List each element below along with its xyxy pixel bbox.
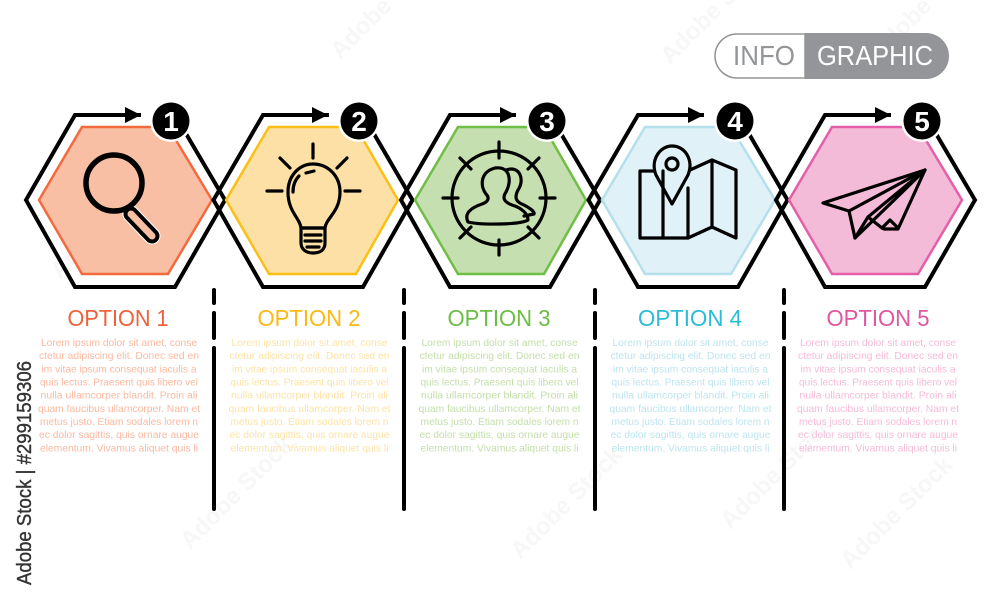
column: option 2 text: OPTION 2 <box>258 305 360 331</box>
number badge 1: 1 <box>163 106 179 137</box>
badge: INFO GRAPHIC <box>715 33 949 79</box>
column: option 3 text: quam faucibus ullamcorper. Nam et <box>418 403 581 415</box>
number badge 1 <box>150 100 192 142</box>
arrow 5 <box>875 107 891 123</box>
column: option 4 text: ec dolor sagittis, quis ornare augue <box>610 429 771 441</box>
column: option 2 text: elementum. Vivamus aliquet quis li <box>230 442 388 454</box>
column: option 4 text: ctetur adipiscing elit. Donec sed en <box>610 350 771 362</box>
column: option 4 text <box>610 305 772 454</box>
column: option 5 text <box>797 305 959 454</box>
panel: option 4 hexagon <box>588 107 788 287</box>
column: option 2 text: Lorem ipsum dolor sit amet, conse <box>232 337 388 349</box>
column: option 1 text: quis lectus. Praesent quis libero vel <box>40 376 198 388</box>
column: option 5 text: quam faucibus ullamcorper. Nam et <box>797 403 959 415</box>
watermark pattern: Adobe Stock <box>45 161 168 284</box>
column: option 1 text <box>38 305 200 454</box>
number badge 4 <box>714 100 756 142</box>
column: option 1 text: im vitae ipsum consequat iaculis a <box>42 363 197 375</box>
badge: INFO GRAPHIC: GRAPHIC <box>817 40 933 71</box>
column: option 3 text: metus justo. Etiam sodales lorem n <box>420 416 579 428</box>
stock id side label: Adobe Stock | #299159306 <box>14 361 36 585</box>
column: option 2 text: ctetur adipiscing elit. Donec sed en <box>230 350 390 362</box>
watermark pattern: Adobe Stock <box>505 441 628 564</box>
number badge 2 <box>338 100 380 142</box>
divider lines <box>214 290 784 509</box>
column: option 1 text: ec dolor sagittis, quis ornare augue <box>39 429 199 441</box>
column: option 5 text: quis lectus. Praesent quis libero vel <box>799 376 957 388</box>
column: option 3 text: nulla ullamcorper blandit. Proin ali <box>421 390 578 402</box>
badge: INFO GRAPHIC: INFO <box>733 40 795 71</box>
number badge 5: 5 <box>914 106 930 137</box>
number badge 3: 3 <box>539 106 555 137</box>
column: option 4 text: metus justo. Etiam sodales lorem n <box>612 416 770 428</box>
column: option 5 text: ctetur adipiscing elit. Donec sed en <box>798 350 958 362</box>
arrow 1 <box>125 107 141 123</box>
column: option 4 text: nulla ullamcorper blandit. Proin ali <box>612 390 769 402</box>
number badge 3 <box>526 100 568 142</box>
column: option 1 text: metus justo. Etiam sodales lorem n <box>40 416 198 428</box>
column: option 2 text <box>228 305 391 454</box>
icon: map with pin <box>640 146 736 238</box>
panel: option 2 hexagon <box>214 107 412 287</box>
column: option 5 text: Lorem ipsum dolor sit amet, conse <box>800 337 956 349</box>
column: option 5 text: elementum. Vivamus aliquet quis li <box>799 442 957 454</box>
panel: option 1 hexagon <box>26 107 225 287</box>
column: option 3 text: ctetur adipiscing elit. Donec sed en <box>420 350 580 362</box>
column: option 1 text: nulla ullamcorper blandit. Proin ali <box>40 390 198 402</box>
column: option 5 text: OPTION 5 <box>826 305 930 331</box>
column: option 4 text: quis lectus. Praesent quis libero vel <box>612 376 770 388</box>
column: option 3 text <box>418 305 581 454</box>
column: option 3 text: im vitae ipsum consequat iaculis a <box>422 363 577 375</box>
column: option 2 text: quam faucibus ullamcorper. Nam et <box>228 403 391 415</box>
icon: people target <box>443 142 555 255</box>
column: option 4 text: Lorem ipsum dolor sit amet, conse <box>612 337 769 349</box>
arrow 2 <box>312 107 328 123</box>
column: option 2 text: im vitae ipsum consequat iaculis a <box>232 363 387 375</box>
icon: paper plane <box>823 170 925 238</box>
number badge 4: 4 <box>727 106 743 137</box>
column: option 2 text: nulla ullamcorper blandit. Proin ali <box>231 390 388 402</box>
column: option 3 text: elementum. Vivamus aliquet quis li <box>420 442 578 454</box>
column: option 3 text: Lorem ipsum dolor sit amet, conse <box>422 337 578 349</box>
arrow 4 <box>688 107 704 123</box>
icon: light bulb <box>267 144 360 253</box>
column: option 4 text: quam faucibus ullamcorper. Nam et <box>610 403 772 415</box>
column: option 1 text: quam faucibus ullamcorper. Nam et <box>38 403 200 415</box>
column: option 1 text: OPTION 1 <box>68 305 168 331</box>
column: option 5 text: nulla ullamcorper blandit. Proin ali <box>800 390 956 402</box>
arrow 3 <box>500 107 516 123</box>
watermark pattern: Adobe Stock <box>715 411 838 534</box>
column: option 5 text: ec dolor sagittis, quis ornare augue <box>798 429 958 441</box>
panel: option 3 hexagon <box>401 107 600 287</box>
column: option 3 text: OPTION 3 <box>448 305 550 331</box>
column: option 3 text: quis lectus. Praesent quis libero vel <box>420 376 578 388</box>
column: option 4 text: OPTION 4 <box>638 305 742 331</box>
watermark pattern: Adobe Stock <box>175 431 298 554</box>
column: option 2 text: quis lectus. Praesent quis libero vel <box>230 376 388 388</box>
number badge 2: 2 <box>351 106 367 137</box>
number badge 5 <box>901 100 943 142</box>
column: option 4 text: im vitae ipsum consequat iaculis a <box>613 363 768 375</box>
icon: magnifying glass <box>86 155 152 236</box>
column: option 3 text: ec dolor sagittis, quis ornare augue <box>420 429 580 441</box>
column: option 1 text: elementum. Vivamus aliquet quis li <box>40 442 198 454</box>
column: option 1 text: ctetur adipiscing elit. Donec sed en <box>39 350 199 362</box>
column: option 5 text: metus justo. Etiam sodales lorem n <box>799 416 957 428</box>
column: option 1 text: Lorem ipsum dolor sit amet, conse <box>41 337 197 349</box>
panel: option 5 hexagon <box>776 107 975 287</box>
column: option 2 text: metus justo. Etiam sodales lorem n <box>230 416 389 428</box>
watermark pattern: Adobe Stock <box>835 451 958 574</box>
column: option 4 text: elementum. Vivamus aliquet quis li <box>612 442 770 454</box>
column: option 2 text: ec dolor sagittis, quis ornare augue <box>230 429 390 441</box>
column: option 5 text: im vitae ipsum consequat iaculis a <box>800 363 956 375</box>
